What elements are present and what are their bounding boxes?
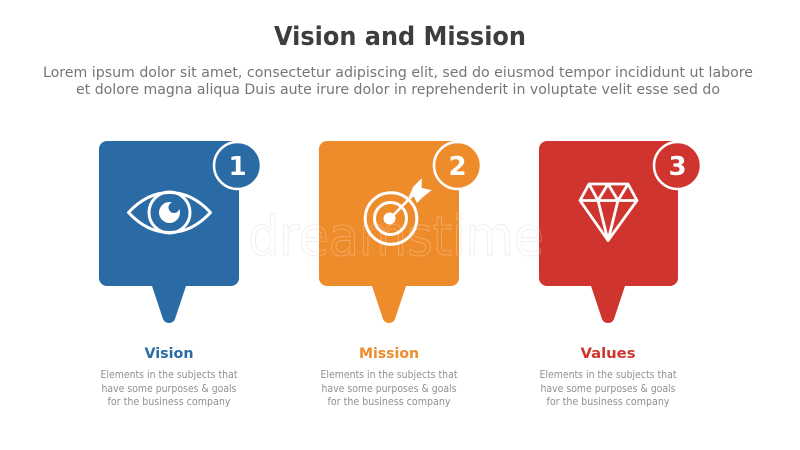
label: values: Values bbox=[580, 346, 636, 362]
number badge 3 bbox=[654, 142, 701, 189]
panel: vision bbox=[99, 141, 261, 408]
label: vision: Vision bbox=[144, 346, 194, 362]
watermark over panels: dreamstime bbox=[248, 205, 544, 268]
number badge 2: 2 bbox=[448, 152, 467, 182]
speech bubble: values bbox=[539, 141, 678, 323]
icon: target with arrow bbox=[365, 178, 432, 244]
description: values: have some purposes & goals bbox=[540, 383, 676, 395]
subtitle: et dolore magna aliqua Duis aute irure dolor in reprehenderit in voluptate velit esse sed do bbox=[76, 82, 720, 98]
subtitle: Lorem ipsum dolor sit amet, consectetur adipiscing elit, sed do eiusmod tempor incididunt ut labore bbox=[43, 65, 753, 81]
description: mission bbox=[320, 369, 458, 408]
description: values: for the business company bbox=[546, 396, 670, 408]
description: mission: for the business company bbox=[328, 396, 450, 408]
number badge 1 bbox=[214, 142, 261, 189]
description: mission: have some purposes & goals bbox=[322, 383, 456, 395]
description: vision bbox=[100, 369, 238, 408]
speech bubble: mission bbox=[319, 141, 459, 323]
panel: mission bbox=[319, 141, 481, 408]
number badge 2 bbox=[434, 142, 481, 189]
number badge 3: 3 bbox=[668, 152, 687, 182]
description: mission: Elements in the subjects that bbox=[320, 369, 458, 381]
icon: eye bbox=[128, 192, 210, 233]
panel: values bbox=[539, 141, 701, 408]
number badge 1: 1 bbox=[228, 152, 247, 182]
description: vision: have some purposes & goals bbox=[102, 383, 236, 395]
description: vision: for the business company bbox=[108, 396, 230, 408]
label: mission: Mission bbox=[359, 346, 419, 362]
title: Vision and Mission bbox=[274, 22, 526, 52]
description: values: Elements in the subjects that bbox=[540, 369, 676, 381]
subtitle bbox=[43, 65, 753, 98]
speech bubble: vision bbox=[99, 141, 239, 323]
description: vision: Elements in the subjects that bbox=[100, 369, 238, 381]
watermark on background: dreamstime bbox=[248, 205, 544, 268]
description: values bbox=[540, 369, 676, 408]
icon: diamond bbox=[580, 184, 637, 240]
